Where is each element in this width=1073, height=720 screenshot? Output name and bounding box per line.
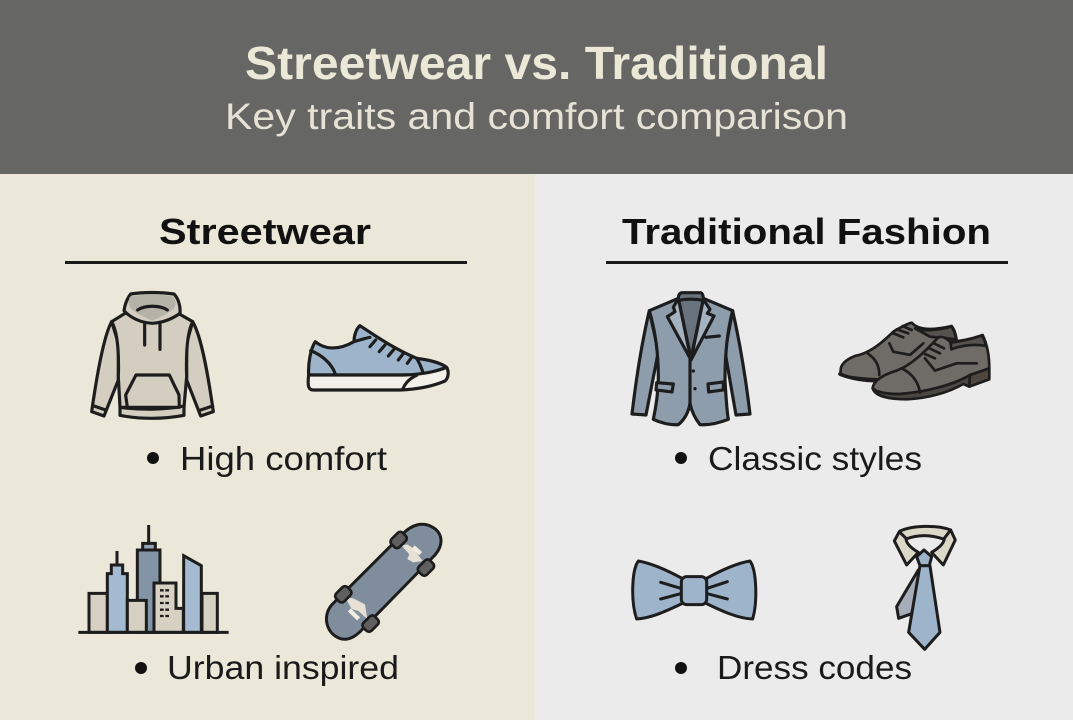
bullet: high comfort: High comfort bbox=[180, 440, 387, 477]
bullet: classic styles: Classic styles bbox=[708, 440, 922, 477]
traditional heading rule bbox=[606, 261, 1008, 264]
bullet: dress codes: Dress codes bbox=[717, 649, 912, 686]
subtitle: Key traits and comfort comparison bbox=[225, 96, 848, 137]
title: Streetwear vs. Traditional bbox=[245, 37, 828, 89]
streetwear heading: Streetwear bbox=[159, 211, 371, 252]
icon: city skyline bbox=[78, 525, 229, 632]
icon: sneaker bbox=[308, 326, 448, 390]
streetwear heading rule bbox=[65, 261, 467, 264]
traditional heading: Traditional Fashion bbox=[622, 211, 991, 252]
icon: necktie with collar bbox=[894, 526, 955, 649]
icon: bow tie bbox=[633, 561, 756, 619]
panel: traditional fashion bbox=[535, 174, 1073, 720]
icon: blazer bbox=[632, 293, 750, 425]
panel: streetwear bbox=[0, 174, 535, 720]
icon: skateboard bbox=[326, 524, 441, 639]
icon: hoodie bbox=[92, 292, 213, 418]
header band bbox=[0, 0, 1073, 174]
icon: dress shoes bbox=[840, 323, 989, 399]
bullet: urban inspired: Urban inspired bbox=[167, 649, 399, 686]
